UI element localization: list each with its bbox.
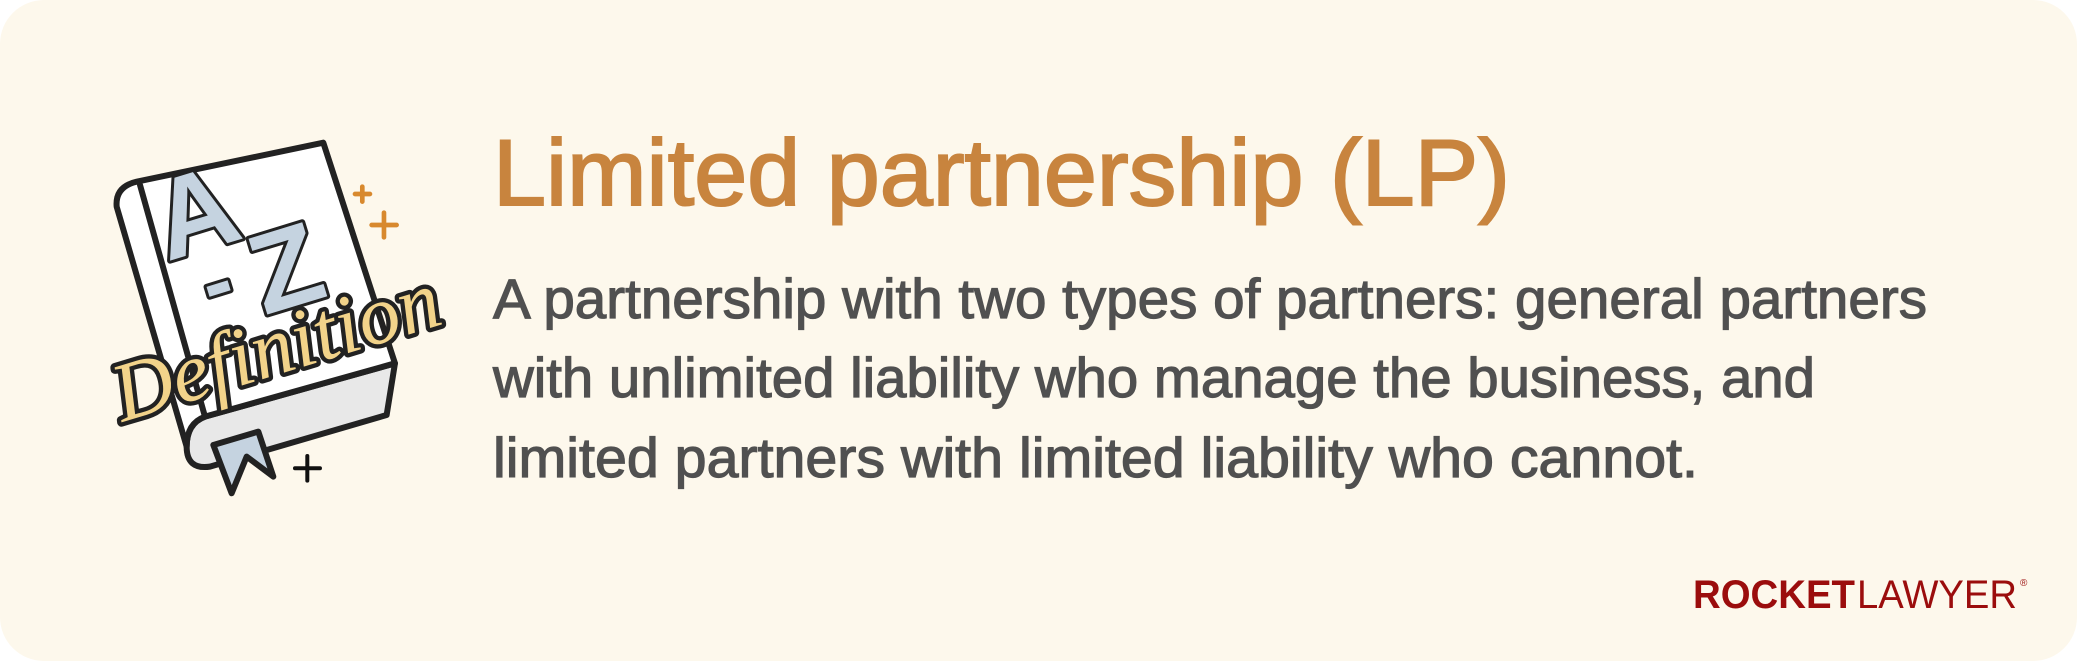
logo: Rocket Lawyer: ROCKET xyxy=(1693,573,1855,617)
body text: with unlimited liability who manage the business, and xyxy=(492,346,1815,409)
icon: A-Z definition book: Z xyxy=(234,198,338,339)
body text: A partnership with two types of partners: general partners xyxy=(493,267,1927,330)
icon: A-Z definition book: Definition xyxy=(100,254,451,441)
body text: limited partners with limited liability who cannot. xyxy=(493,426,1698,489)
logo: Rocket Lawyer: LAWYER xyxy=(1857,573,2017,617)
body text xyxy=(492,267,1927,489)
icon: A-Z definition book: - xyxy=(189,232,245,332)
icon: A-Z definition book: A xyxy=(138,140,253,285)
logo: Rocket Lawyer xyxy=(1693,573,2028,617)
title: Limited partnership (LP) xyxy=(493,120,1510,225)
icon: A-Z definition book xyxy=(100,121,451,493)
logo: Rocket Lawyer: ® xyxy=(2020,578,2028,589)
